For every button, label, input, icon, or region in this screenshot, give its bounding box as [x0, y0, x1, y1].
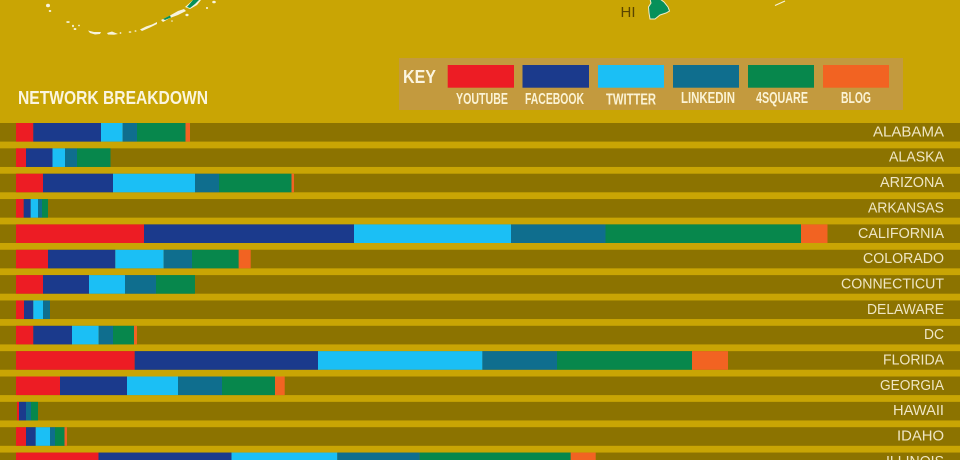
row: Delaware [0, 300, 960, 319]
row: Florida: FLORIDA [883, 352, 944, 369]
legend item: YouTube [448, 65, 514, 108]
map: Hawaii label: HI [620, 4, 636, 21]
row: Alaska [0, 148, 960, 167]
map: Hawaii big island [648, 0, 670, 19]
chart: network breakdown stacked bars by state [0, 123, 960, 460]
row: Connecticut: CONNECTICUT [841, 276, 944, 293]
legend item: 4square: 4SQUARE [756, 90, 808, 107]
row: California [0, 224, 960, 243]
heading: network breakdown: NETWORK BREAKDOWN [18, 88, 208, 108]
row: Arizona [0, 174, 960, 192]
row: Arizona: ARIZONA [880, 174, 944, 191]
legend item: Twitter: TWITTER [606, 92, 656, 108]
row: Hawaii [0, 402, 960, 420]
row: Delaware: DELAWARE [867, 301, 944, 318]
legend: key [399, 58, 903, 110]
legend item: Twitter [598, 65, 664, 108]
legend item: LinkedIn: LINKEDIN [681, 90, 735, 107]
row: DC: DC [924, 326, 944, 343]
row: Colorado: COLORADO [863, 250, 944, 267]
row: Alabama: ALABAMA [873, 124, 944, 141]
legend item: Blog: BLOG [841, 90, 871, 107]
legend item: 4square [748, 65, 814, 107]
row: Idaho: IDAHO [897, 428, 944, 445]
row: California: CALIFORNIA [858, 225, 944, 242]
map: coastline fragment [775, 1, 785, 6]
legend: key: KEY [403, 67, 436, 87]
row: DC [0, 326, 960, 344]
row: Colorado [0, 250, 960, 268]
row: Georgia [0, 376, 960, 395]
row: Arkansas: ARKANSAS [868, 199, 944, 216]
legend item: Facebook [522, 65, 589, 108]
row: Alabama [0, 123, 960, 142]
legend item: Facebook: FACEBOOK [525, 91, 585, 108]
row: Alaska: ALASKA [889, 149, 944, 166]
row: Illinois [0, 453, 960, 460]
row: Idaho [0, 427, 960, 446]
row: Florida [0, 351, 960, 370]
row: Arkansas [0, 199, 960, 218]
row: Georgia: GEORGIA [880, 377, 944, 394]
legend item: Blog [823, 65, 889, 107]
legend item: YouTube: YOUTUBE [456, 91, 508, 108]
row: Connecticut [0, 275, 960, 294]
row: Hawaii: HAWAII [893, 402, 944, 419]
map: Alaska island chain [46, 0, 216, 35]
legend item: LinkedIn [673, 65, 739, 107]
